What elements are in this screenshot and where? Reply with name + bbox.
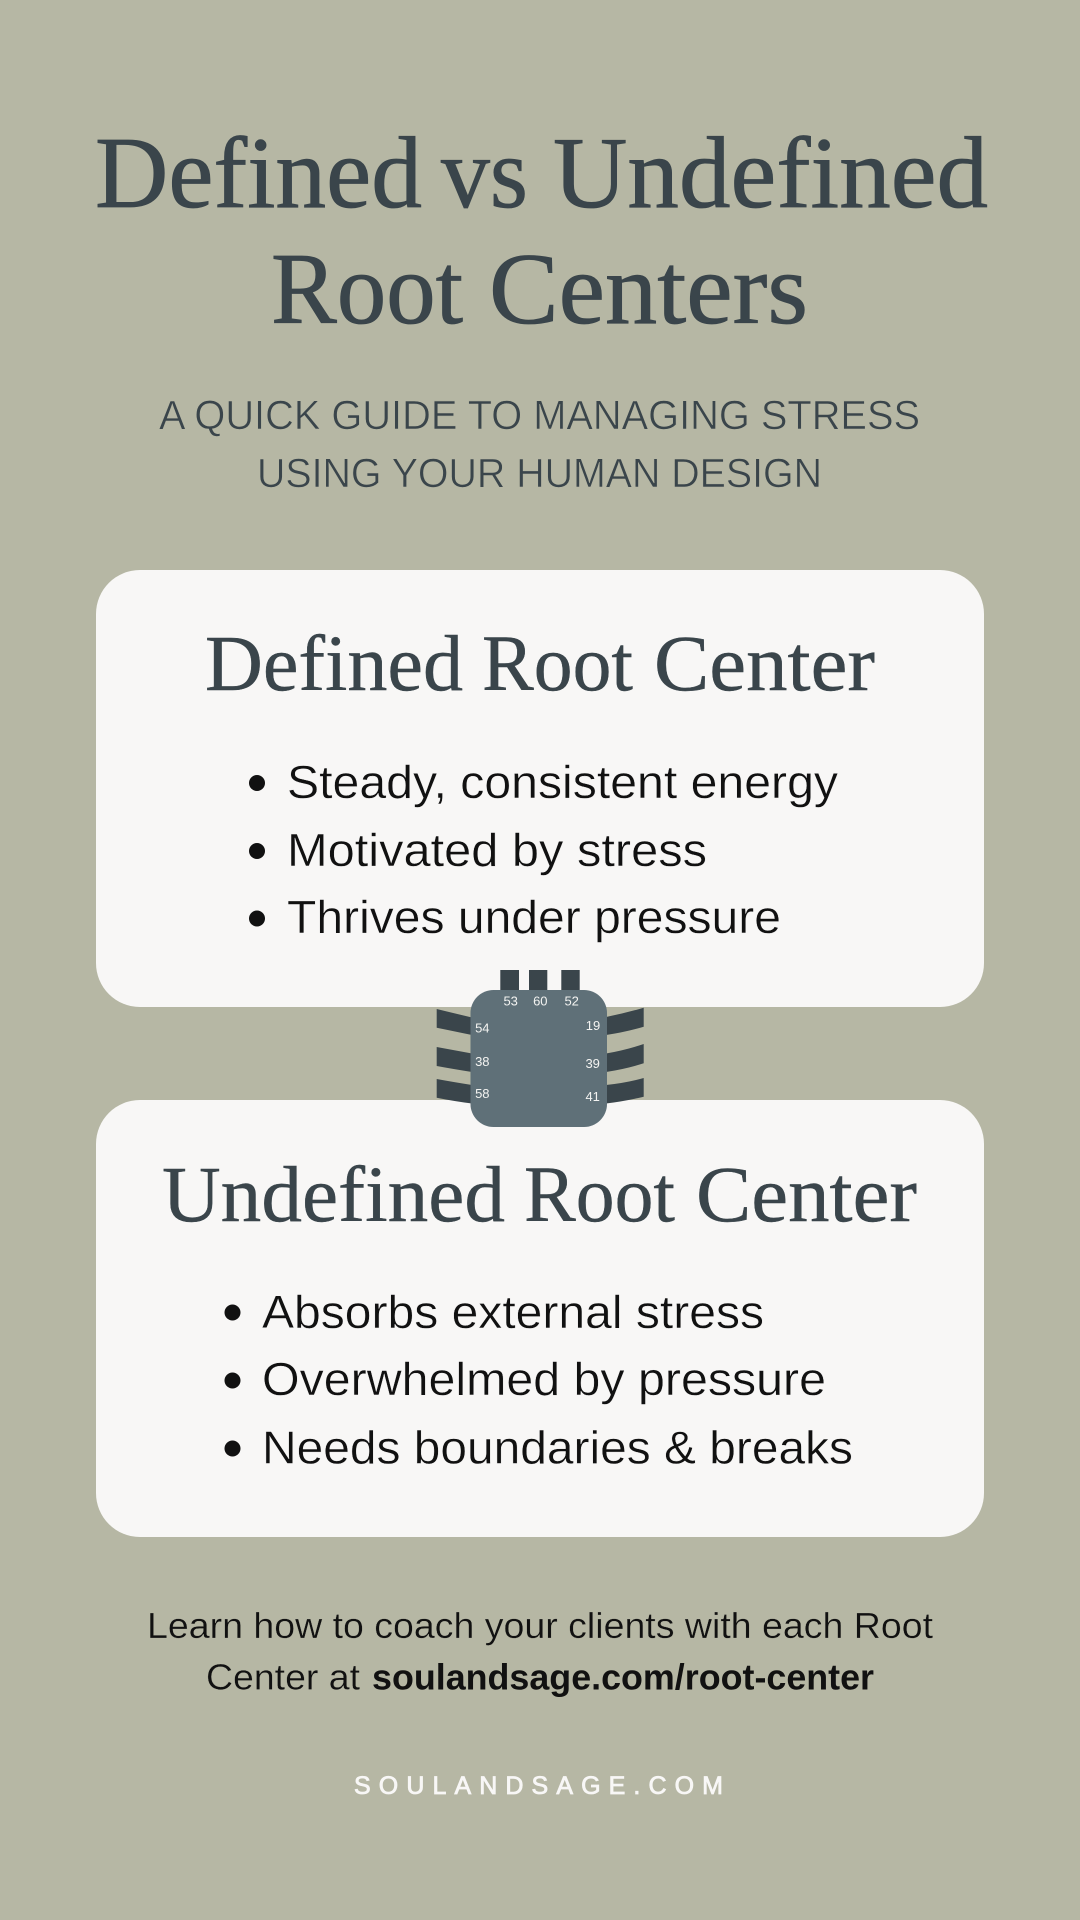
- heading: undefined root center: Root: [524, 1152, 675, 1239]
- list: undefined traits: Needs boundaries & breaks: [262, 1422, 853, 1474]
- title: Centers: [489, 233, 808, 346]
- call to action: soulandsage.com/root-center: [372, 1656, 874, 1698]
- list: undefined traits: [224, 1286, 853, 1474]
- panel: defined root center: [96, 570, 984, 1007]
- title: vs: [441, 117, 528, 230]
- title: Undefined: [553, 117, 988, 230]
- website footer: SOULANDSAGE.COM: [354, 1772, 723, 1800]
- heading: defined root center: [205, 621, 875, 708]
- list: defined traits: [249, 756, 838, 943]
- title: [95, 117, 988, 346]
- panel: undefined root center: [96, 1100, 984, 1537]
- icon: root center chip: 39: [585, 1056, 600, 1071]
- icon: root center chip: 41: [585, 1089, 600, 1104]
- list: undefined traits: Overwhelmed by pressure: [262, 1353, 826, 1405]
- icon: root center chip: 58: [475, 1086, 490, 1101]
- icon: root center chip: 38: [475, 1054, 490, 1069]
- list: defined traits: Thrives under pressure: [287, 891, 781, 943]
- icon: root center chip: [437, 970, 644, 1127]
- icon: root center chip: 54: [475, 1020, 490, 1035]
- list: undefined traits: Absorbs external stress: [262, 1286, 764, 1338]
- heading: defined root center: Center: [654, 621, 875, 708]
- heading: undefined root center: Center: [696, 1152, 917, 1239]
- icon: root center chip: 52: [564, 994, 579, 1008]
- icon: root center chip: 60: [533, 994, 548, 1008]
- call to action: [147, 1605, 933, 1698]
- heading: undefined root center: [162, 1152, 917, 1239]
- call to action: Center at: [206, 1656, 360, 1698]
- heading: undefined root center: Undefined: [162, 1152, 505, 1239]
- subtitle: USING YOUR HUMAN DESIGN: [257, 450, 822, 496]
- title: Root: [271, 233, 463, 346]
- heading: defined root center: Root: [482, 621, 633, 708]
- title: Defined: [95, 117, 422, 230]
- call to action: Learn how to coach your clients with each Root: [147, 1605, 933, 1646]
- subtitle: [159, 392, 920, 496]
- heading: defined root center: Defined: [205, 621, 463, 708]
- subtitle: A QUICK GUIDE TO MANAGING STRESS: [159, 392, 920, 438]
- icon: root center chip: 19: [586, 1018, 600, 1033]
- icon: root center chip: 53: [503, 994, 518, 1008]
- list: defined traits: Motivated by stress: [287, 824, 707, 876]
- list: defined traits: Steady, consistent energy: [287, 756, 838, 808]
